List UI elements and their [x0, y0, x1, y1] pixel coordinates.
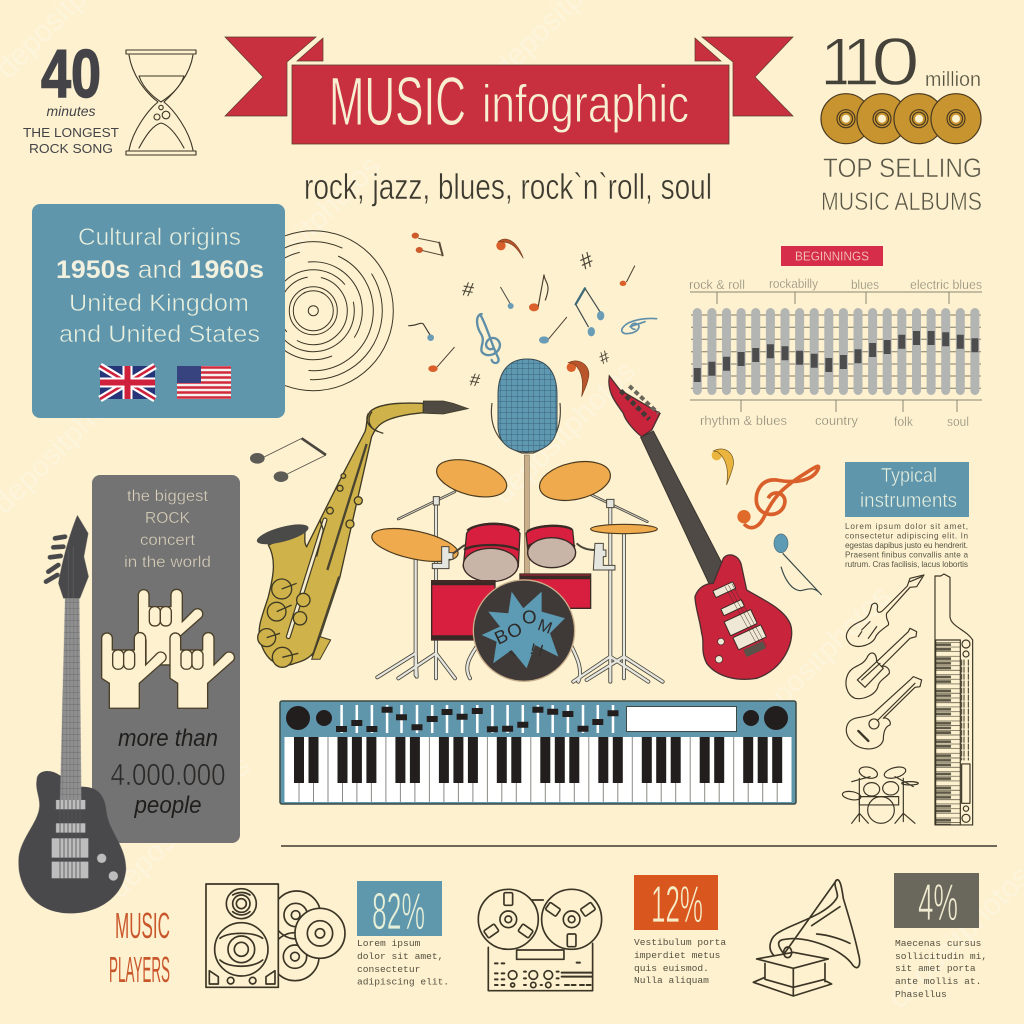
note: grey-blue stems [428, 266, 635, 372]
text block: instruments: rutrum. Cras facilisis, lacus lobortis [845, 560, 968, 569]
icon: UK flag [100, 366, 155, 399]
icon: electric guitar outline [846, 575, 924, 646]
text block: 12% [634, 937, 726, 986]
stat: 4% [894, 873, 979, 932]
divider line [281, 845, 997, 847]
sharp symbols: # [461, 278, 476, 302]
title text: infographic [482, 75, 689, 134]
icon: US flag [177, 366, 231, 399]
stat: 110 million albums [820, 24, 982, 216]
note: beamed blue [576, 288, 604, 336]
text: MUSIC [115, 905, 170, 946]
panel: biggest rock concert: concert [140, 532, 196, 549]
watermark: depositphotos [742, 580, 897, 735]
sharp symbols: # [596, 347, 613, 368]
sharp symbols: # [576, 246, 598, 275]
boom burst: \ [509, 649, 517, 660]
icon: keytar outline [935, 574, 973, 825]
boom burst: B [491, 624, 511, 649]
concert size text [110, 725, 226, 819]
cymbals [369, 453, 657, 568]
panel: biggest rock concert: ROCK [145, 510, 191, 527]
text block: 4%: sollicitudin mi, [895, 951, 987, 962]
text: PLAYERS [109, 949, 170, 990]
note: small eighth [529, 275, 548, 311]
stat: 12% [634, 875, 718, 934]
text block: 4%: Maecenas cursus [895, 938, 981, 949]
note: bass clef top [496, 239, 523, 258]
slider tracks [697, 312, 975, 390]
top genre labels [689, 277, 982, 292]
icon: rock hands [102, 589, 234, 708]
boom burst [482, 592, 565, 668]
bottom genre labels: soul [947, 415, 969, 429]
heading: beginnings: BEGINNINGS [795, 248, 869, 264]
panel: cultural origins: and United States [59, 321, 260, 348]
icon: treble clef blue [477, 314, 500, 363]
icon: small treble clef [622, 318, 657, 334]
panel: cultural origins [32, 204, 285, 418]
bass drum [473, 580, 575, 681]
text block: instruments [845, 522, 968, 569]
text block: 82%: Lorem ipsum [357, 938, 421, 949]
icons: outline instruments [842, 574, 973, 825]
boom burst: ! [528, 641, 537, 658]
icon: vinyl record [231, 229, 395, 393]
icon: drum kit [369, 453, 663, 682]
concert size text: more than [118, 725, 218, 752]
boom burst: O [503, 618, 525, 643]
tom right [526, 525, 576, 568]
watermark: depositphotos [232, 150, 387, 305]
microphone stand [524, 455, 529, 577]
icon: discs [821, 94, 981, 144]
stat: 40 minutes: minutes [46, 103, 96, 119]
stat: 110 million albums: MUSIC ALBUMS [821, 188, 982, 216]
text block: instruments: consectetur adipiscing elit. In [845, 532, 968, 540]
icon: orange treble clef [737, 466, 819, 528]
stat: 12%: 12% [651, 876, 703, 934]
concert size text: 4.000.000 [110, 757, 226, 792]
bottom genre labels: country [815, 414, 859, 428]
icon: eighth notes grey [250, 438, 326, 482]
text block: 82%: adipiscing elit. [357, 976, 449, 988]
tom left [463, 523, 520, 582]
slider handles [694, 331, 978, 382]
boom burst: M [535, 615, 555, 638]
floating music notes [409, 233, 657, 397]
panel: biggest rock concert: in the world [124, 554, 211, 571]
icon: acoustic guitar outline [846, 677, 922, 749]
subtitle: rock, jazz, blues, rock`n`roll, soul [304, 166, 712, 207]
boom burst: ! [537, 642, 545, 660]
title text: MUSIC [329, 63, 466, 140]
text block: 4%: ante mollis at. [895, 976, 981, 987]
clamps [432, 543, 615, 570]
text block: 12%: imperdiet metus [634, 950, 720, 961]
panel: biggest rock concert [92, 475, 240, 843]
top genre labels: rock & roll [689, 278, 745, 292]
text block: instruments: Lorem ipsum dolor sit amet, [845, 522, 968, 531]
text block: 82%: consectetur [357, 964, 420, 975]
text block: 82% [357, 938, 449, 988]
panel: typical instruments: instruments [860, 490, 957, 512]
title text [329, 63, 689, 140]
text block: 4% [895, 938, 987, 1000]
icon: hourglass [126, 50, 196, 155]
text block: 12%: Nulla aliquam [634, 975, 709, 986]
title banner [225, 37, 793, 144]
stat: 82%: 82% [372, 883, 425, 941]
stat: 110 million albums: 11 [820, 24, 880, 100]
bottom genre labels [700, 414, 969, 429]
text block: instruments: Praesent finibus convallis ante a [845, 550, 968, 560]
stands [377, 492, 663, 682]
icon: hollow guitar outline [846, 628, 917, 699]
icon: speaker and discs [206, 884, 345, 987]
text block: 12%: Vestibulum porta [634, 937, 726, 948]
top genre labels: blues [851, 278, 879, 292]
text block: 4%: Phasellus [895, 989, 947, 1000]
note: yellow bass clef [712, 449, 734, 485]
text block: instruments: egestas dapibus justo eu hendrerit. [845, 541, 968, 550]
icon: saxophone [255, 401, 468, 667]
panel: typical instruments: Typical [881, 465, 937, 487]
watermark: depositphotos [487, 355, 642, 510]
text block: 82%: dolor sit amet, [357, 951, 443, 962]
text block: 12%: quis euismod. [634, 963, 709, 974]
panel: typical instruments [845, 462, 969, 517]
stat: 40 minutes: ROCK SONG [29, 141, 113, 156]
stat: 110 million albums: million [925, 69, 981, 91]
boom burst: O [521, 606, 537, 628]
bass shell [432, 574, 591, 640]
panel: biggest rock concert: the biggest [127, 488, 209, 505]
stat: 40 minutes: THE LONGEST [23, 125, 119, 140]
top genre labels: rockabilly [769, 277, 819, 291]
stat: 110 million albums: TOP SELLING [823, 153, 982, 183]
stat: 4%: 4% [918, 874, 958, 932]
sharp symbols: # [468, 369, 482, 391]
stat: 40 minutes [23, 36, 119, 156]
icon: gramophone [753, 880, 860, 996]
icon: blue note [774, 534, 822, 595]
bottom genre labels: rhythm & blues [700, 414, 787, 428]
stat: 82% [357, 881, 442, 941]
icon: keyboard synthesizer [280, 701, 796, 804]
icon: black electric guitar [18, 515, 126, 913]
sharp symbols [461, 246, 613, 391]
top genre labels: electric blues [910, 278, 982, 292]
concert size text: people [134, 792, 202, 819]
icon: red electric guitar [609, 376, 822, 679]
note: flag blue left [409, 323, 434, 341]
stat: 40 minutes: 40 [41, 36, 101, 112]
panel: cultural origins: Cultural origins [78, 224, 241, 251]
icon: reel to reel tape recorder [478, 889, 602, 991]
heading: music players [109, 905, 170, 990]
note: bass clef bottom [567, 361, 589, 397]
chart: beginnings equalizer timeline [689, 246, 982, 429]
stat: 110 million albums: 0 [871, 24, 920, 100]
panel: cultural origins: United Kingdom [69, 290, 249, 317]
heading: beginnings [781, 246, 883, 266]
bottom genre labels: folk [894, 415, 914, 429]
icon: microphone [491, 359, 560, 453]
watermark: depositphotos [102, 750, 257, 905]
dates: 1950s and 1960s [56, 256, 264, 284]
text block: 4%: sit amet porta [895, 963, 976, 974]
note: beamed orange [412, 233, 443, 255]
icon: drum kit outline [842, 765, 918, 823]
